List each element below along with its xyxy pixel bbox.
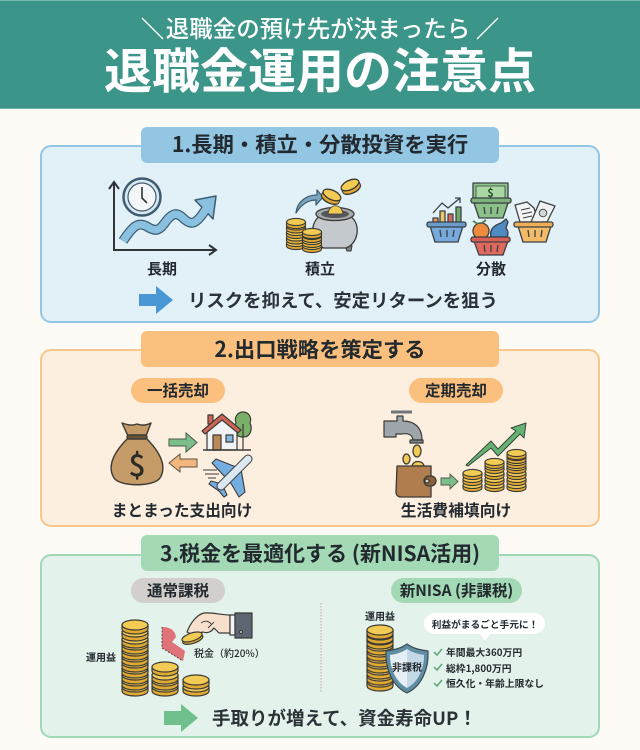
heading pill 2: 2.出口戦略を策定する (214, 333, 426, 364)
arrow: from plane (169, 454, 197, 472)
divider (320, 603, 322, 692)
panel: 2 exit strategy (41, 331, 599, 526)
icon: growing coin stacks (463, 449, 526, 492)
heading pill 2 (141, 331, 499, 367)
sub-pill: lump-sum sale: 一括売却 (147, 379, 209, 401)
icon: coin stack with shield: 非課税 (392, 659, 422, 674)
checklist: 年間最大360万円 (446, 645, 522, 659)
checklist (434, 645, 544, 690)
takeaway 3: 手取りが増えて、資金寿命UP！ (212, 705, 477, 731)
icon: diversified baskets (427, 183, 555, 255)
sub-pill: normal taxation: 通常課税 (147, 579, 209, 601)
icon: accumulation pot and coins (286, 177, 362, 253)
icon: money bag (111, 423, 163, 485)
label: investment gains right: 運用益 (365, 608, 395, 623)
takeaway 1: リスクを抑えて、安定リターンを狙う (188, 287, 498, 313)
checklist: 総枠1,800万円 (446, 661, 512, 675)
icon: coin stack with shield (367, 625, 428, 693)
panel: 1 long-term, accumulation, diversification (41, 127, 599, 322)
label: accumulation: 積立 (305, 258, 335, 279)
label: diversification: 分散 (476, 258, 506, 279)
arrow: to house (169, 433, 197, 452)
checklist: 恒久化・年齢上限なし (446, 676, 544, 690)
label: for living expenses: 生活費補填向け (401, 498, 511, 521)
label: long-term: 長期 (147, 258, 177, 279)
arrow: small green (441, 474, 458, 489)
label: for lump expenses: まとまった支出向け (112, 498, 252, 521)
arrow: green (164, 704, 198, 732)
arrow: green trend (466, 423, 526, 466)
sub-pill: periodic sale (409, 378, 503, 403)
sub-pill: periodic sale: 定期売却 (425, 379, 487, 401)
icon: red tax slice (162, 627, 185, 661)
icon: wallet with dropping coins (396, 445, 436, 497)
arrow: blue (139, 286, 173, 314)
title: 退職金運用の注意点 (104, 32, 536, 102)
callout bubble: 利益がまるごと手元に！ (432, 617, 538, 631)
sub-pill: lump-sum sale (131, 378, 225, 403)
heading pill 3: 3.税金を最適化する (新NISA活用) (160, 538, 480, 568)
label: tax rate: 税金（約20%） (194, 645, 265, 660)
orange basket with papers (514, 201, 555, 242)
icon: faucet (384, 412, 423, 443)
callout bubble (424, 613, 545, 641)
icon: house and tree (202, 412, 251, 450)
label: investment gains left: 運用益 (86, 649, 116, 664)
icon: airplane (203, 459, 248, 497)
subtitle: 退職金の預け先が決まったら (166, 10, 470, 44)
blue basket with chart (427, 198, 466, 242)
header band (0, 0, 640, 109)
icon: hand taking coin (181, 613, 252, 646)
panel: 3 tax optimization (41, 535, 599, 737)
icon: long-term chart with clock (109, 178, 216, 255)
icon: coin stacks taxed (122, 620, 209, 696)
sub-pill: new NISA: 新NISA (非課税) (400, 579, 513, 601)
green basket with banknote: $ (487, 185, 494, 201)
heading pill 1: 1.長期・積立・分散投資を実行 (172, 128, 468, 159)
icon: money bag: $ (128, 441, 146, 485)
sub-pill: normal taxation (131, 578, 225, 603)
red basket with food (471, 219, 510, 255)
